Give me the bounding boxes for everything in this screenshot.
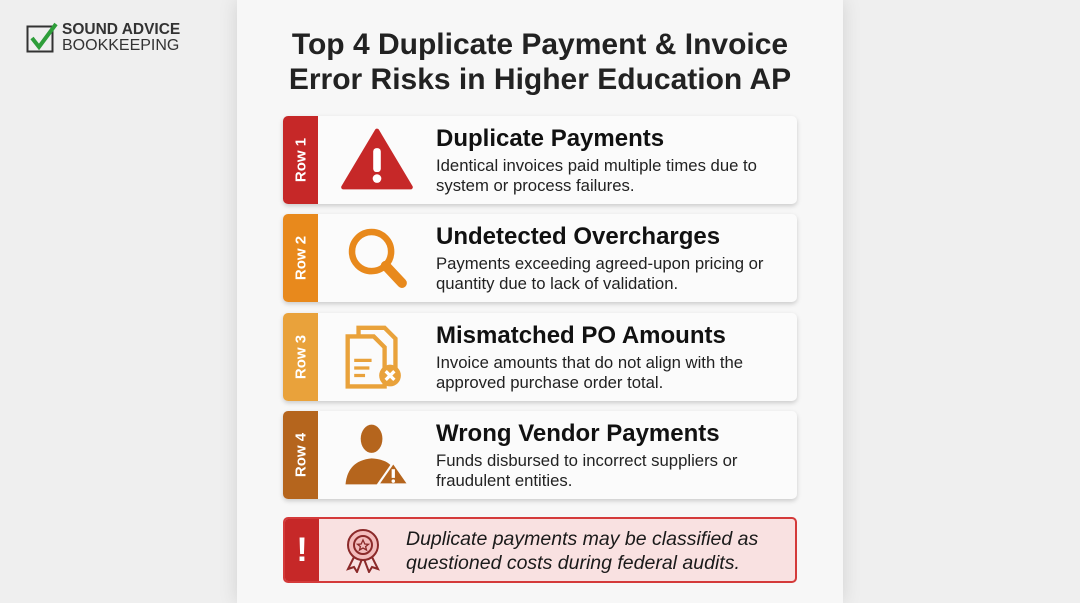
row 2: Undetected Overcharges	[436, 223, 720, 250]
row 3: Row 3	[292, 335, 309, 379]
callout text	[406, 528, 758, 574]
logo	[26, 21, 180, 54]
callout tab	[285, 519, 319, 581]
row 2: Row 2	[292, 236, 309, 280]
logo: SOUND ADVICE	[62, 21, 180, 38]
background panel	[237, 0, 843, 603]
row 3: Invoice amounts that do not align with the approved purchase order total.	[436, 353, 743, 392]
row 3: Mismatched PO Amounts	[436, 322, 726, 349]
icon: magnifier	[348, 228, 407, 288]
callout	[283, 517, 797, 583]
row 4: Row 4	[292, 433, 309, 477]
logo: BOOKKEEPING	[62, 37, 179, 54]
row 1: Identical invoices paid multiple times due to system or process failures.	[436, 156, 757, 194]
row 1: Row 1	[292, 138, 309, 182]
row 4	[283, 411, 797, 499]
row 4: Wrong Vendor Payments	[436, 420, 720, 447]
icon: warning	[341, 128, 413, 190]
callout tab: !	[296, 531, 308, 569]
icon: person warning	[346, 424, 406, 484]
icon: award badge	[346, 529, 380, 573]
row 1: Duplicate Payments	[436, 125, 664, 152]
callout text: questioned costs during federal audits.	[406, 552, 740, 574]
row 4: Funds disbursed to incorrect suppliers or fraudulent entities.	[436, 451, 737, 490]
title: Error Risks in Higher Education AP	[289, 63, 791, 96]
callout text: Duplicate payments may be classified as	[406, 528, 758, 550]
title: Top 4 Duplicate Payment & Invoice	[292, 28, 788, 61]
row 2	[283, 214, 797, 302]
icon: documents	[346, 326, 401, 389]
row 1	[283, 116, 797, 204]
row 2: Payments exceeding agreed-upon pricing or quantity due to lack of validation.	[436, 254, 763, 292]
row 3	[283, 313, 797, 401]
title	[289, 28, 791, 96]
